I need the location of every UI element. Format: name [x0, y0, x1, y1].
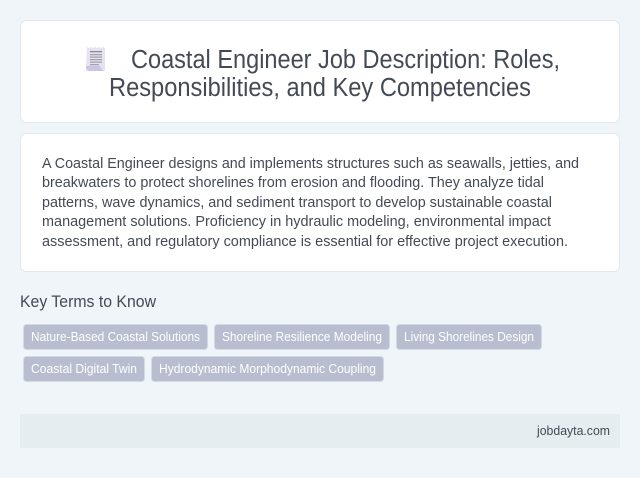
tag: Coastal Digital Twin: Coastal Digital Twin [31, 362, 137, 376]
tag: Hydrodynamic Morphodynamic Coupling: Hydrodynamic Morphodynamic Coupling [159, 362, 376, 376]
tag: Coastal Digital Twin [24, 356, 144, 382]
text block: description: A Coastal Engineer designs and implements structures such as seawalls, jetties, and [42, 155, 579, 172]
title: Responsibilities, and Key Competencies [109, 74, 531, 102]
tag: Shoreline Resilience Modeling [214, 324, 390, 350]
footer [20, 414, 620, 448]
title [109, 46, 560, 102]
panel: title card [20, 20, 620, 122]
tag: Shoreline Resilience Modeling: Shoreline Resilience Modeling [222, 330, 382, 344]
text block: description: assessment, and regulatory compliance is essential for effective project execution. [42, 233, 568, 250]
text block: description: patterns, wave dynamics, and sediment transport to develop sustainable coastal [42, 194, 552, 211]
text block: description: management solutions. Proficiency in hydraulic modeling, environmental impact [42, 213, 552, 230]
text block: description: breakwaters to protect shorelines from erosion and flooding. They analyze tidal [42, 174, 544, 191]
title: Coastal Engineer Job Description: Roles, [131, 46, 560, 74]
footer: jobdayta.com [536, 424, 610, 438]
tag: Nature-Based Coastal Solutions [24, 324, 208, 350]
tag: Living Shorelines Design: Living Shorelines Design [404, 330, 534, 344]
text block: description [42, 155, 579, 250]
heading: key terms: Key Terms to Know [20, 293, 156, 311]
tag: Nature-Based Coastal Solutions: Nature-Based Coastal Solutions [31, 330, 200, 344]
tag: Living Shorelines Design [396, 324, 542, 350]
tag: Hydrodynamic Morphodynamic Coupling [152, 356, 384, 382]
panel: description [20, 134, 620, 272]
icon: scroll document [86, 47, 105, 71]
